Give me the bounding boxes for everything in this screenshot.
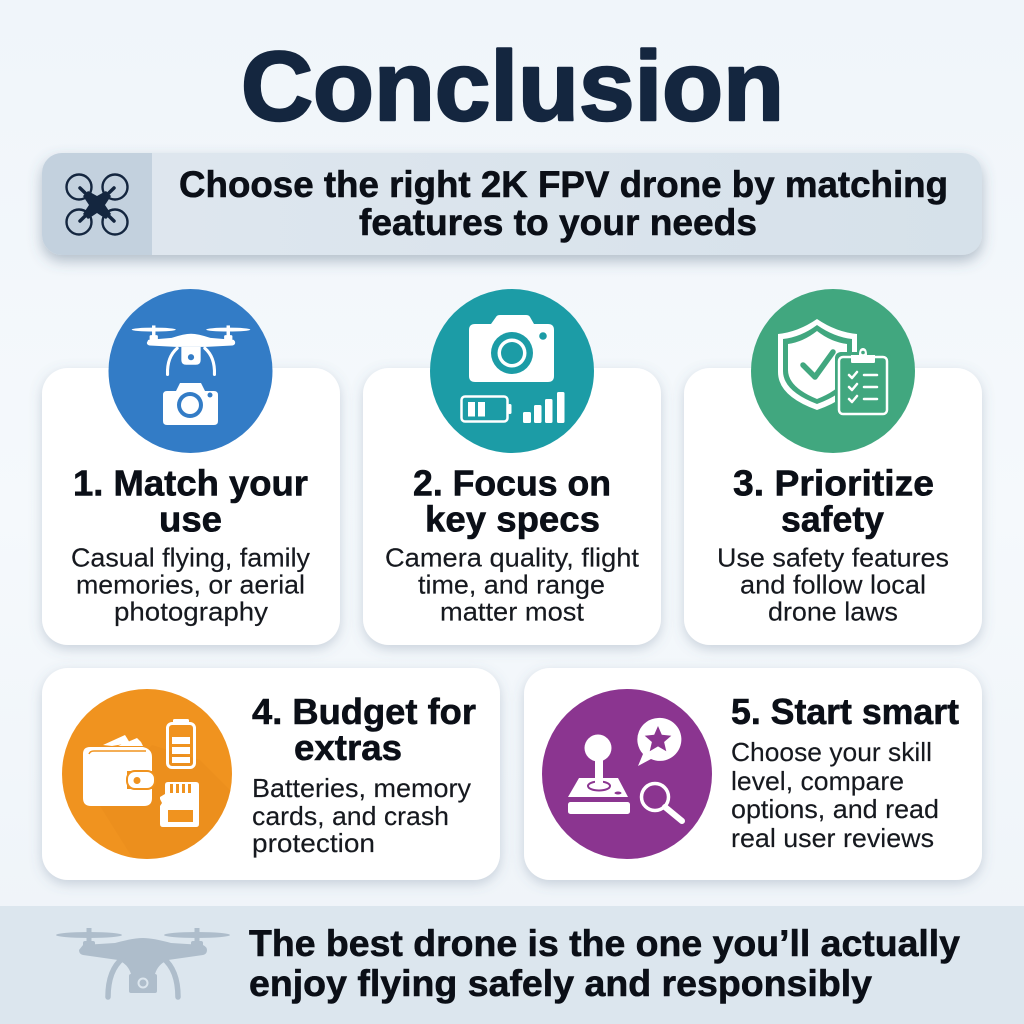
panel: start smart [524, 668, 982, 880]
icon: joystick, star bubble and magnifier [568, 718, 682, 821]
title: Conclusion [241, 31, 784, 141]
card title: 3. Prioritize [733, 462, 934, 504]
closing message: enjoy flying safely and responsibly [249, 963, 872, 1004]
card body: matter most [440, 596, 585, 626]
card title: key specs [425, 498, 600, 540]
card title: 4. Budget for [252, 691, 476, 732]
card body: drone laws [768, 596, 898, 626]
panel: match your use [42, 289, 340, 645]
panel: focus on key specs [363, 289, 661, 645]
card body: Batteries, memory [252, 773, 471, 803]
card body: cards, and crash [252, 801, 449, 831]
card title: 1. Match your [73, 462, 308, 504]
icon: camera, battery and signal [462, 315, 564, 423]
card body: protection [252, 828, 375, 858]
card body: Camera quality, flight [385, 542, 640, 572]
icon: drone silhouette [56, 928, 230, 997]
card body: photography [114, 596, 268, 626]
card body: memories, or aerial [76, 570, 305, 600]
card title: extras [294, 727, 402, 768]
icon: shield and clipboard [778, 319, 891, 418]
card body: Choose your skill [731, 737, 932, 767]
banner text: features to your needs [359, 202, 757, 243]
card title: use [159, 498, 222, 540]
card body: and follow local [740, 570, 926, 600]
icon: drone and camera [132, 325, 250, 425]
panel: budget for extras [42, 668, 500, 880]
card body: Casual flying, family [71, 542, 310, 572]
footer band [0, 906, 1024, 1024]
card title: 2. Focus on [413, 462, 611, 504]
panel: prioritize safety [684, 289, 982, 645]
banner [42, 153, 982, 255]
card body: options, and read [731, 794, 939, 824]
card title: 5. Start smart [731, 691, 959, 732]
card title: safety [781, 498, 884, 540]
icon: wallet, battery and memory card [83, 719, 199, 827]
icon: quadcopter top view [66, 174, 128, 234]
closing message: The best drone is the one you’ll actually [249, 923, 960, 964]
banner text: Choose the right 2K FPV drone by matching [179, 164, 948, 205]
card body: time, and range [418, 570, 605, 600]
card body: level, compare [731, 766, 904, 796]
card body: Use safety features [717, 542, 949, 572]
card body: real user reviews [731, 823, 934, 853]
